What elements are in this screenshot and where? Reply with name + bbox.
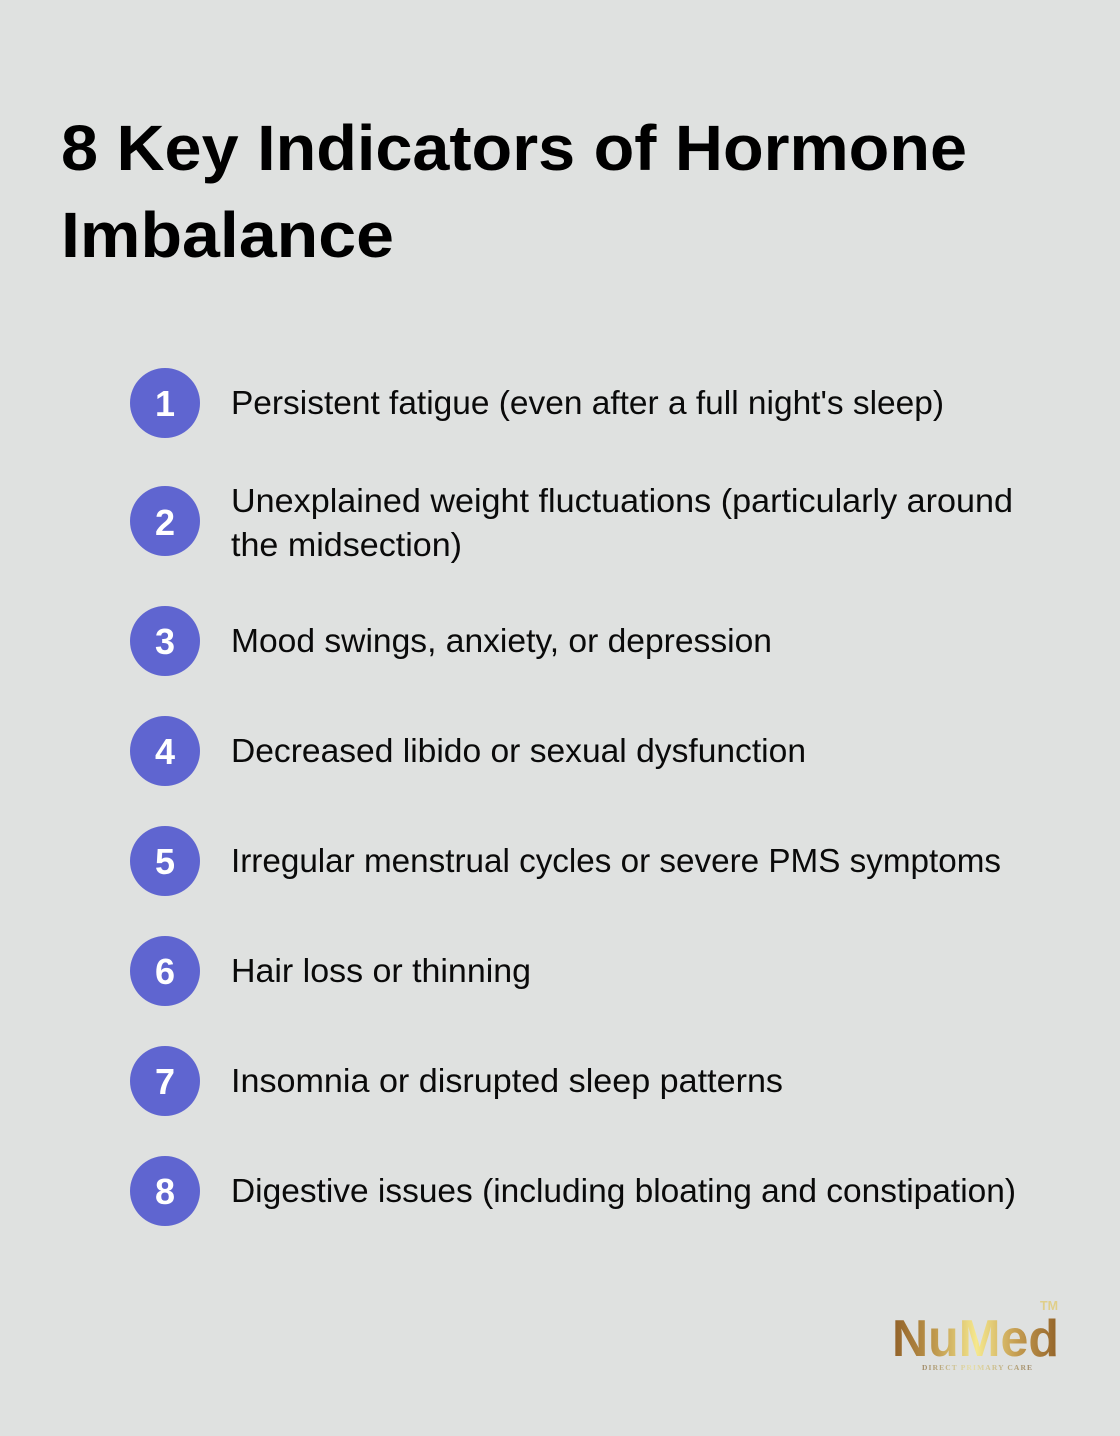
item 3 xyxy=(130,606,772,676)
item 4: Decreased libido or sexual dysfunction xyxy=(231,732,806,769)
title: Imbalance xyxy=(61,199,394,271)
logo: NuMed: NuMed xyxy=(892,1310,1059,1368)
item 5: 5 xyxy=(155,841,175,882)
item 7: Insomnia or disrupted sleep patterns xyxy=(231,1062,783,1099)
title: 8 Key Indicators of Hormone xyxy=(61,112,967,184)
title xyxy=(61,112,967,271)
item 2 xyxy=(130,482,1013,563)
item 6 xyxy=(130,936,531,1006)
item 8 xyxy=(130,1156,1016,1226)
item 3: 3 xyxy=(155,621,175,662)
logo: NuMed: TM xyxy=(1040,1298,1058,1313)
item 1: Persistent fatigue (even after a full night's sleep) xyxy=(231,384,944,421)
item 4 xyxy=(130,716,806,786)
item 5: Irregular menstrual cycles or severe PMS symptoms xyxy=(231,842,1001,879)
item 6: Hair loss or thinning xyxy=(231,952,531,989)
item 7: 7 xyxy=(155,1061,175,1102)
item 1: 1 xyxy=(155,383,175,424)
item 6: 6 xyxy=(155,951,175,992)
item 7 xyxy=(130,1046,783,1116)
item 8: Digestive issues (including bloating and constipation) xyxy=(231,1172,1016,1209)
item 2: 2 xyxy=(155,502,175,543)
logo: NuMed: DIRECT PRIMARY CARE xyxy=(922,1363,1032,1372)
item 8: 8 xyxy=(155,1171,175,1212)
item 5 xyxy=(130,826,1001,896)
item 3: Mood swings, anxiety, or depression xyxy=(231,622,772,659)
list of indicators xyxy=(130,368,1016,1226)
item 4: 4 xyxy=(155,731,175,772)
item 2: Unexplained weight fluctuations (particularly around xyxy=(231,482,1013,519)
item 2: the midsection) xyxy=(231,526,462,563)
item 1 xyxy=(130,368,944,438)
